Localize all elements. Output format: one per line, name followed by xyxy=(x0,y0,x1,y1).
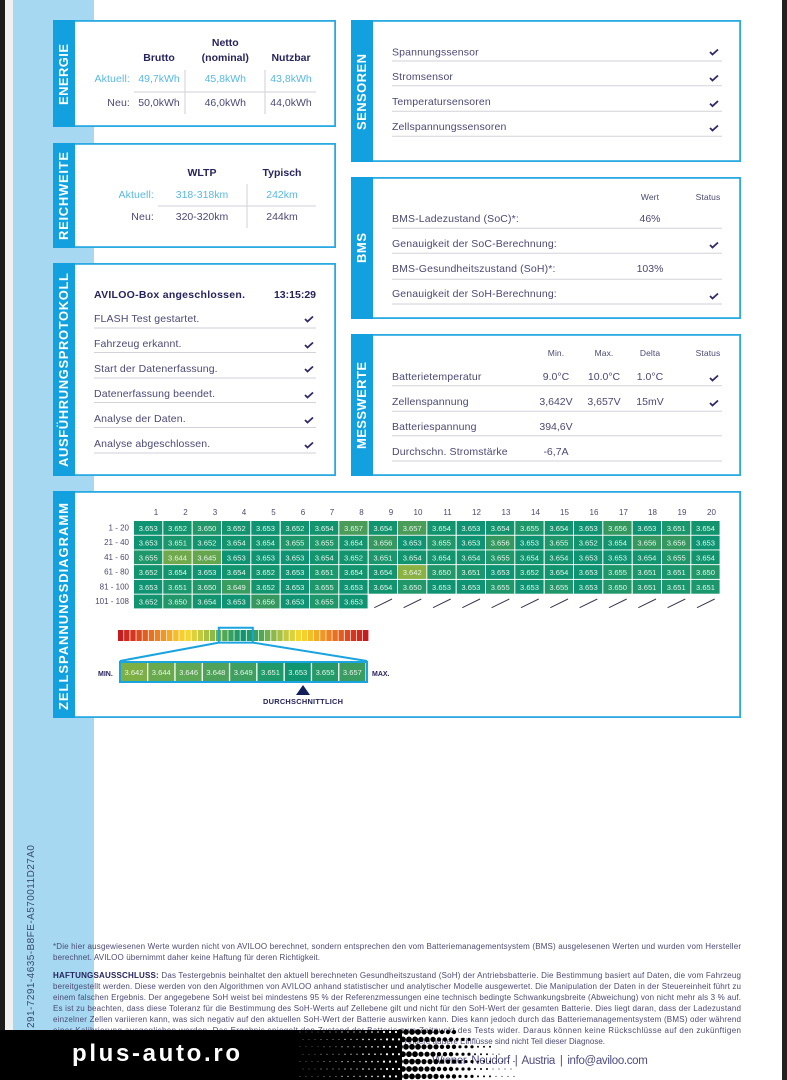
banner site name: plus-auto.ro xyxy=(72,1040,240,1067)
column numbers: 12 xyxy=(472,508,481,517)
row 1-20: 3.653 xyxy=(256,524,275,533)
row 41-60: 3.654 xyxy=(403,553,422,562)
measurements table: 3,642V xyxy=(539,396,573,408)
row 81-100: 3.653 xyxy=(285,583,304,592)
row 81-100: 3.651 xyxy=(637,583,656,592)
column numbers: 16 xyxy=(590,508,599,517)
column numbers: 20 xyxy=(707,508,716,517)
row 61-80: 3.651 xyxy=(667,568,686,577)
row 21-40: 3.656 xyxy=(637,539,656,548)
row 101-108: 3.655 xyxy=(315,597,334,606)
row 21-40: 3.656 xyxy=(491,539,510,548)
column numbers: 10 xyxy=(414,508,423,517)
legend: min to max values: MIN. xyxy=(98,671,113,678)
measurements table: Zellenspannung xyxy=(392,396,469,408)
panel: BMS xyxy=(351,177,740,319)
row 61-80: 3.654 xyxy=(549,568,568,577)
heading: Messwerte: MESSWERTE xyxy=(354,362,369,449)
measurements table: Batteriespannung xyxy=(392,421,477,433)
row 61-80: 3.653 xyxy=(197,568,216,577)
row 61-80: 3.651 xyxy=(461,568,480,577)
row 61-80: 3.654 xyxy=(227,568,246,577)
row 1-20: 3.652 xyxy=(168,524,187,533)
panel: Sensoren xyxy=(351,20,740,162)
row 101-108: 3.656 xyxy=(256,597,275,606)
table: energy values: Neu: xyxy=(107,97,130,109)
row 1-20 xyxy=(134,521,720,535)
column numbers: 18 xyxy=(648,508,657,517)
table: energy values: Aktuell: xyxy=(94,73,130,85)
panel: Energie xyxy=(53,20,335,127)
row labels: 61 - 80 xyxy=(104,568,130,577)
row 41-60: 3.652 xyxy=(344,553,363,562)
row 41-60: 3.644 xyxy=(168,553,187,562)
legend: min to max values: 3.655 xyxy=(316,668,335,677)
vertical document id: 291-7291-4635-B8FE-A570011D27A0 xyxy=(26,845,37,1028)
legend: min to max values: 3.649 xyxy=(234,668,253,677)
row 61-80: 3.652 xyxy=(256,568,275,577)
row 21-40: 3.654 xyxy=(344,539,363,548)
row 21-40: 3.654 xyxy=(227,539,246,548)
row 41-60: 3.653 xyxy=(285,553,304,562)
row labels: 101 - 108 xyxy=(95,597,130,606)
table: energy values: Brutto xyxy=(143,52,175,64)
BMS table xyxy=(392,192,722,304)
row 1-20: 3.654 xyxy=(696,524,715,533)
row 61-80 xyxy=(134,565,720,579)
row 81-100: 3.651 xyxy=(168,583,187,592)
column numbers: 5 xyxy=(271,508,276,517)
row 81-100: 3.650 xyxy=(608,583,627,592)
row 61-80: 3.653 xyxy=(491,568,510,577)
row 101-108 xyxy=(134,595,368,608)
column numbers: 7 xyxy=(330,508,335,517)
BMS table: Genauigkeit der SoC-Berechnung: xyxy=(392,238,557,250)
row 41-60: 3.654 xyxy=(637,553,656,562)
row 81-100: 3.653 xyxy=(432,583,451,592)
log header: AVILOO-Box angeschlossen. xyxy=(94,289,245,301)
BMS table: BMS-Ladezustand (SoC)*: xyxy=(392,213,519,225)
empty cell slashes xyxy=(374,599,715,608)
log rows with checkmarks: Start der Datenerfassung. xyxy=(94,363,218,375)
zoom frame and funnel xyxy=(120,628,367,661)
column numbers: 8 xyxy=(359,508,364,517)
measurements table: 9.0°C xyxy=(543,371,570,383)
log header: 13:15:29 xyxy=(274,289,316,301)
row 41-60: 3.654 xyxy=(696,553,715,562)
row 81-100: 3.652 xyxy=(256,583,275,592)
legend: min to max values: 3.644 xyxy=(152,668,171,677)
measurements table: Max. xyxy=(595,348,613,358)
row 81-100: 3.653 xyxy=(344,583,363,592)
legend: min to max values: 3.646 xyxy=(179,668,198,677)
row 21-40: 3.653 xyxy=(139,539,158,548)
row labels: 1 - 20 xyxy=(109,524,130,532)
row 61-80: 3.655 xyxy=(608,568,627,577)
row labels: 21 - 40 xyxy=(104,538,130,547)
legend: min to max values: 3.657 xyxy=(343,668,362,677)
table: energy values: 43,8kWh xyxy=(270,73,312,85)
row 21-40: 3.654 xyxy=(608,539,627,548)
row 41-60: 3.645 xyxy=(197,553,216,562)
table: energy values: 46,0kWh xyxy=(205,97,246,109)
row 61-80: 3.650 xyxy=(432,568,451,577)
table: range values: WLTP xyxy=(188,167,216,179)
row 21-40: 3.653 xyxy=(696,539,715,548)
disclaimer text: einem falschen Ergebnis. Der angegebene SoH weist bei mindestens 95 % der Referenzmessungen eine technisch bedingte Schwankungsbreite (Abweichung) von nicht mehr als 3 % auf. xyxy=(53,993,741,1002)
table: range values: Typisch xyxy=(263,167,301,179)
column numbers: 6 xyxy=(301,508,306,517)
row 61-80: 3.651 xyxy=(315,568,334,577)
disclaimer text: bereitgestellt werden. Diese werden von den Algorithmen von AVILOO anhand statistischer und analytischer Modelle ausgewertet. Die Manipulation der Daten in der Steuereinheit führt zu xyxy=(53,982,741,991)
row 81-100: 3.654 xyxy=(373,583,392,592)
row 1-20: 3.657 xyxy=(344,524,363,533)
measurements table: 3,657V xyxy=(587,396,621,408)
table: energy values: Netto xyxy=(212,37,239,49)
column numbers: 17 xyxy=(619,508,628,517)
measurements table: 15mV xyxy=(636,396,664,408)
row 1-20: 3.653 xyxy=(637,524,656,533)
table: range values: 244km xyxy=(266,211,298,223)
disclaimer text: Zustand der Batterie gezogen werden. Andere äußere Einflüsse sind nicht Teil dieser Diagnose. xyxy=(267,1037,605,1046)
log rows with checkmarks: Fahrzeug erkannt. xyxy=(94,338,182,350)
cell voltage heatmap xyxy=(134,521,720,608)
row 1-20: 3.652 xyxy=(227,524,246,533)
table: energy values: 50,0kWh xyxy=(138,97,180,109)
table: range values xyxy=(118,167,316,228)
column numbers: 13 xyxy=(502,508,511,517)
row 81-100: 3.650 xyxy=(403,583,422,592)
heading: Zellspannungsdiagramm: ZELLSPANNUNGSDIAGRAMM xyxy=(56,503,71,710)
row 81-100: 3.649 xyxy=(227,583,246,592)
row 41-60: 3.654 xyxy=(520,553,539,562)
row 41-60: 3.653 xyxy=(256,553,275,562)
measurements table xyxy=(392,348,722,461)
row 61-80: 3.653 xyxy=(579,568,598,577)
row 21-40: 3.655 xyxy=(315,539,334,548)
row 81-100: 3.650 xyxy=(197,583,216,592)
log rows with checkmarks: Analyse der Daten. xyxy=(94,413,186,425)
row 41-60: 3.655 xyxy=(667,553,686,562)
row 41-60: 3.655 xyxy=(139,553,158,562)
row 21-40: 3.653 xyxy=(403,539,422,548)
column numbers: 2 xyxy=(183,508,188,517)
row labels: 81 - 100 xyxy=(100,582,130,591)
row 41-60: 3.655 xyxy=(491,553,510,562)
row 61-80: 3.642 xyxy=(403,568,422,577)
heading: BMS: BMS xyxy=(354,233,369,263)
row 101-108: 3.653 xyxy=(344,597,363,606)
row 1-20: 3.656 xyxy=(608,524,627,533)
column numbers: 4 xyxy=(242,508,247,517)
row 41-60: 3.654 xyxy=(315,553,334,562)
panel: Messwerte xyxy=(351,334,740,476)
measurements table: Delta xyxy=(640,348,660,358)
log header xyxy=(94,289,316,301)
row 1-20: 3.652 xyxy=(285,524,304,533)
log rows with checkmarks xyxy=(94,313,316,453)
row 101-108: 3.653 xyxy=(285,597,304,606)
panel: Ausführungsprotokoll xyxy=(53,263,335,476)
disclaimer text xyxy=(53,942,741,1046)
row 81-100 xyxy=(134,580,720,594)
colour scale bar xyxy=(118,630,368,641)
row 1-20: 3.650 xyxy=(197,524,216,533)
row 1-20: 3.654 xyxy=(549,524,568,533)
legend: min to max values: 3.648 xyxy=(206,668,225,677)
row 61-80: 3.654 xyxy=(373,568,392,577)
table: energy values xyxy=(94,37,316,114)
row 1-20: 3.654 xyxy=(491,524,510,533)
disclaimer text: berechnet. AVILOO übernimmt daher keine Haftung für deren Richtigkeit. xyxy=(53,953,320,962)
row 101-108: 3.653 xyxy=(227,597,246,606)
sensor rows with checkmarks: Spannungssensor xyxy=(392,46,479,58)
column numbers: 14 xyxy=(531,508,540,517)
row 81-100: 3.653 xyxy=(520,583,539,592)
row 41-60 xyxy=(134,550,720,564)
legend: min to max values: 3.653 xyxy=(288,668,307,677)
row 21-40: 3.653 xyxy=(520,539,539,548)
row 1-20: 3.651 xyxy=(667,524,686,533)
row 61-80: 3.652 xyxy=(520,568,539,577)
table: energy values: (nominal) xyxy=(202,52,249,64)
column numbers xyxy=(154,508,716,517)
measurements table: 1.0°C xyxy=(637,371,664,383)
measurements table: 394,6V xyxy=(539,421,573,433)
row 41-60: 3.653 xyxy=(227,553,246,562)
panel: Reichweite xyxy=(53,143,335,248)
table: range values: 318-318km xyxy=(176,189,229,201)
sensor rows with checkmarks: Temperatursensoren xyxy=(392,96,491,108)
row 21-40: 3.654 xyxy=(256,539,275,548)
BMS table: BMS-Gesundheitszustand (SoH)*: xyxy=(392,263,556,275)
row 21-40: 3.652 xyxy=(579,539,598,548)
table: range values: Aktuell: xyxy=(118,189,154,201)
row 1-20: 3.654 xyxy=(315,524,334,533)
sensor rows with checkmarks: Zellspannungssensoren xyxy=(392,121,506,133)
row 81-100: 3.655 xyxy=(315,583,334,592)
row 81-100: 3.653 xyxy=(461,583,480,592)
measurements table: Durchschn. Stromstärke xyxy=(392,446,508,458)
row 101-108: 3.652 xyxy=(139,597,158,606)
measurements table: Status xyxy=(696,348,720,358)
row 41-60: 3.651 xyxy=(373,553,392,562)
disclaimer text: einzelner Zellen variieren kann, was sich negativ auf den aktuellen SoH-Wert der Batterie auswirken kann. Dies kann jedoch durch das Batteriemanagementsystem (BMS) oder während xyxy=(53,1015,741,1024)
row 81-100: 3.651 xyxy=(667,583,686,592)
row 21-40: 3.656 xyxy=(373,539,392,548)
column numbers: 15 xyxy=(560,508,569,517)
column numbers: 3 xyxy=(213,508,218,517)
BMS table: Wert xyxy=(641,192,660,202)
table: range values: Neu: xyxy=(131,211,154,223)
log rows with checkmarks: Analyse abgeschlossen. xyxy=(94,438,210,450)
table: energy values: Nutzbar xyxy=(271,52,311,64)
panel: Zellspannungsdiagramm xyxy=(53,491,740,718)
BMS table: Status xyxy=(696,192,720,202)
sensor rows with checkmarks xyxy=(392,46,722,136)
row 61-80: 3.652 xyxy=(139,568,158,577)
light blue side band xyxy=(13,0,94,1030)
watermark banner xyxy=(0,1030,514,1080)
row 21-40: 3.651 xyxy=(168,539,187,548)
log rows with checkmarks: FLASH Test gestartet. xyxy=(94,313,199,325)
row 1-20: 3.653 xyxy=(139,524,158,533)
row 1-20: 3.657 xyxy=(403,524,422,533)
average marker: DURCHSCHNITTLICH xyxy=(263,697,343,706)
row 21-40: 3.656 xyxy=(667,539,686,548)
row 61-80: 3.651 xyxy=(637,568,656,577)
table: range values: 320-320km xyxy=(176,211,229,223)
row 61-80: 3.654 xyxy=(344,568,363,577)
row labels xyxy=(95,524,130,606)
row 61-80: 3.654 xyxy=(168,568,187,577)
row 21-40: 3.653 xyxy=(461,539,480,548)
row 1-20: 3.655 xyxy=(520,524,539,533)
row 61-80: 3.650 xyxy=(696,568,715,577)
log rows with checkmarks: Datenerfassung beendet. xyxy=(94,388,215,400)
BMS table: 103% xyxy=(637,263,663,275)
row 81-100: 3.655 xyxy=(549,583,568,592)
row 41-60: 3.654 xyxy=(432,553,451,562)
row 1-20: 3.654 xyxy=(432,524,451,533)
table: energy values: 45,8kWh xyxy=(205,73,246,85)
disclaimer text: HAFTUNGSAUSSCHLUSS: Das Testergebnis beinhaltet den aktuell berechneten Gesundheitszustand (SoH) der Antriebsbatterie. Die Bestimmung basiert auf Daten, die vom Fahrzeug xyxy=(53,971,741,980)
row 41-60: 3.653 xyxy=(608,553,627,562)
row labels: 41 - 60 xyxy=(104,553,130,562)
legend: min to max values xyxy=(98,662,390,682)
heading: Sensoren: SENSOREN xyxy=(354,54,369,130)
legend: min to max values: 3.651 xyxy=(261,668,280,677)
row 21-40 xyxy=(134,536,720,550)
row 1-20: 3.653 xyxy=(461,524,480,533)
row 21-40: 3.655 xyxy=(549,539,568,548)
banner halftone xyxy=(300,1032,514,1080)
measurements table: 10.0°C xyxy=(588,371,621,383)
column numbers: 19 xyxy=(678,508,687,517)
column numbers: 1 xyxy=(154,508,159,517)
row 61-80: 3.653 xyxy=(285,568,304,577)
footer contact line: Wiener Neudorf | Austria | info@aviloo.com xyxy=(432,1055,648,1067)
row 41-60: 3.654 xyxy=(549,553,568,562)
sensor rows with checkmarks: Stromsensor xyxy=(392,71,453,83)
disclaimer text: *Die hier ausgewiesenen Werte wurden nicht von AVILOO berechnet, sondern entsprechen den vom Batteriemanagementsystem (BMS) ausgelesenen Werten und wurden vom Hersteller xyxy=(53,942,741,951)
disclaimer text: Es ist zu beachten, dass diese Toleranz für die Bestimmung des SoH-Werts auf Zellebene gilt und nicht für den SoH-Wert der gesamten Batterie. Dies liegt daran, dass der Ladezustand xyxy=(53,1004,741,1013)
measurements table: Batterietemperatur xyxy=(392,371,482,383)
measurements table: -6,7A xyxy=(543,446,569,458)
row 81-100: 3.651 xyxy=(696,583,715,592)
row 21-40: 3.652 xyxy=(197,539,216,548)
row 1-20: 3.654 xyxy=(373,524,392,533)
row 101-108: 3.654 xyxy=(197,597,216,606)
row 81-100: 3.653 xyxy=(579,583,598,592)
row 21-40: 3.655 xyxy=(432,539,451,548)
heading: Energie: ENERGIE xyxy=(56,44,71,105)
legend: min to max values: MAX. xyxy=(372,671,390,678)
row 1-20: 3.653 xyxy=(579,524,598,533)
measurements table: Min. xyxy=(548,348,564,358)
average marker xyxy=(263,685,343,706)
table: energy values: 44,0kWh xyxy=(270,97,312,109)
BMS table: 46% xyxy=(639,213,661,225)
heading: Ausführungsprotokoll: AUSFÜHRUNGSPROTOKOLL xyxy=(56,273,71,467)
row 41-60: 3.654 xyxy=(461,553,480,562)
column numbers: 11 xyxy=(443,508,452,517)
row 101-108: 3.650 xyxy=(168,597,187,606)
heading: Reichweite: REICHWEITE xyxy=(56,152,71,240)
row 21-40: 3.655 xyxy=(285,539,304,548)
legend: min to max values: 3.642 xyxy=(124,668,144,677)
row 81-100: 3.655 xyxy=(491,583,510,592)
column numbers: 9 xyxy=(389,508,394,517)
row 41-60: 3.653 xyxy=(579,553,598,562)
table: energy values: 49,7kWh xyxy=(138,73,180,85)
disclaimer text: einer Kalibrierung ausgeglichen werden. Das Ergebnis spiegelt den Zustand der Batterie zum Zeitpunkt des Tests wider. Daraus können keine Rückschlüsse auf den zukünftigen xyxy=(53,1026,741,1035)
table: range values: 242km xyxy=(266,189,298,201)
BMS table: Genauigkeit der SoH-Berechnung: xyxy=(392,288,557,300)
row 81-100: 3.653 xyxy=(139,583,158,592)
